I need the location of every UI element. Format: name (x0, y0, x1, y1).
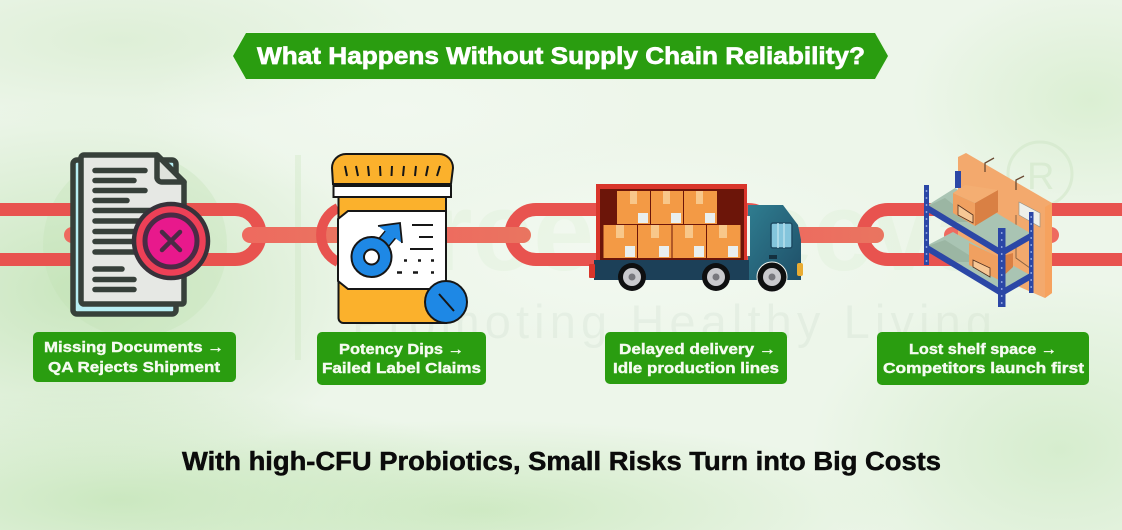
icon: supplement bottle (332, 154, 467, 323)
chain link 2 (120, 210, 260, 260)
front uprights (924, 185, 929, 265)
label: delayed delivery: Idle production lines (613, 360, 779, 377)
top shelf (928, 188, 1030, 250)
watermark logo and brand: Promoting Healthy Living (352, 295, 992, 348)
label: lost shelf space (877, 332, 1089, 385)
icon: delivery truck (589, 184, 803, 292)
label: missing documents: QA Rejects Shipment (48, 359, 220, 376)
watermark logo and brand: R (1027, 156, 1054, 198)
bottom shelf beam (927, 248, 1031, 293)
chain (0, 208, 1122, 262)
label: lost shelf space: Competitors launch first (883, 360, 1084, 377)
side-on links (64, 227, 94, 243)
icon: rejected document (73, 155, 208, 314)
label: potency dips: Failed Label Claims (322, 360, 481, 377)
label: missing documents (33, 332, 236, 382)
cardboard wall (958, 153, 1052, 298)
label: delayed delivery: Delayed delivery → (619, 341, 776, 358)
icon: reject badge (134, 204, 208, 278)
icon: blue pill (425, 281, 467, 323)
label: lost shelf space: Lost shelf space → (909, 341, 1057, 358)
watermark logo and brand (43, 142, 1072, 360)
chain link far right (1050, 210, 1122, 260)
truck cab (748, 205, 801, 280)
chain link far left (0, 210, 72, 260)
label: potency dips (317, 332, 486, 385)
bottom shelf (928, 232, 1030, 290)
title banner (231, 32, 890, 80)
title text: What Happens Without Supply Chain Reliability? (257, 43, 865, 70)
truck cargo box (596, 184, 747, 260)
icon: warehouse shelf (924, 153, 1052, 307)
top shelf beam (927, 208, 1031, 253)
watermark logo and brand: Green Jeeva (345, 169, 996, 294)
rear upright (955, 171, 961, 188)
chain link 4 (863, 210, 1013, 260)
chain link 3 (511, 210, 773, 260)
icon: male symbol (352, 223, 402, 277)
box on bottom shelf (969, 243, 1013, 280)
label: missing documents: Missing Documents → (44, 339, 224, 356)
label: potency dips: Potency Dips → (339, 341, 464, 358)
box on top shelf (953, 185, 998, 226)
label: delayed delivery (605, 332, 787, 384)
truck chassis (594, 260, 749, 280)
truck wheels (618, 262, 787, 292)
closing statement: With high-CFU Probiotics, Small Risks Turn into Big Costs (182, 448, 941, 476)
